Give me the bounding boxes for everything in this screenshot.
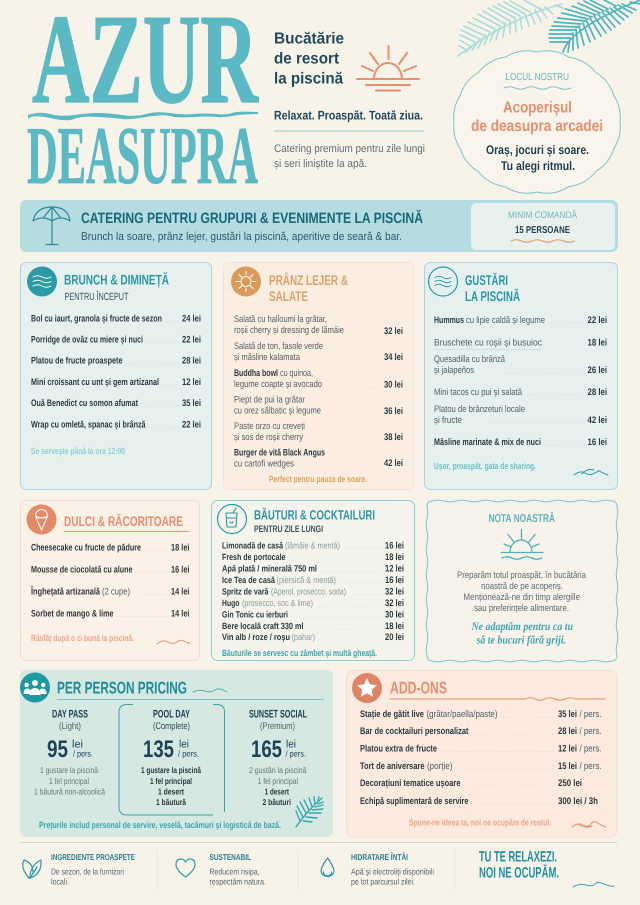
item bbox=[234, 368, 403, 390]
item bbox=[222, 598, 404, 609]
palm leaf: light bbox=[458, 0, 565, 56]
title bbox=[27, 0, 259, 201]
item bbox=[234, 314, 403, 337]
heading: SALATE bbox=[269, 288, 308, 304]
subtitle: la piscină bbox=[274, 70, 343, 88]
icon: small palm bbox=[296, 797, 323, 827]
heading: DULCI & RĂCORITOARE bbox=[64, 513, 183, 529]
footnote: Se servește până la ora 12:00 bbox=[31, 446, 125, 457]
script callout bbox=[471, 621, 574, 646]
item: Ice Tea de casă bbox=[222, 575, 276, 585]
item: cu lipie caldă și legume bbox=[466, 315, 545, 326]
badge: locul nostru: Oraș, jocuri și soare. bbox=[486, 143, 589, 157]
item: 42 lei bbox=[384, 458, 403, 469]
panel: brunch bbox=[20, 262, 212, 490]
panel: lunch bbox=[224, 262, 414, 490]
body text: Preparăm totul proaspăt, în bucătăria bbox=[457, 570, 587, 581]
heading: NOTA NOASTRĂ bbox=[488, 511, 555, 525]
item bbox=[222, 621, 404, 632]
item: 36 lei bbox=[384, 406, 403, 417]
item: cu orez sălbatic și legume bbox=[234, 406, 321, 416]
item bbox=[31, 608, 190, 620]
item: Înghețată artizanală bbox=[30, 586, 101, 598]
heading bbox=[465, 272, 520, 304]
item: Sorbet de mango & lime bbox=[31, 608, 114, 620]
tier: pool day bbox=[119, 704, 224, 815]
item: 28 lei bbox=[558, 726, 577, 737]
tier: day pass: 95 bbox=[47, 736, 68, 763]
tier: day pass: lei bbox=[72, 738, 83, 750]
icon: ice cream bbox=[26, 504, 56, 534]
item bbox=[434, 315, 607, 326]
icon: drop bbox=[321, 858, 334, 877]
item: cu quinoa, bbox=[280, 368, 313, 379]
item: Mousse de ciocolată cu alune bbox=[31, 564, 132, 576]
text: respectăm natura. bbox=[210, 876, 266, 886]
item: 24 lei bbox=[182, 314, 201, 324]
item: 300 lei / 3h bbox=[558, 796, 598, 807]
item: Platou de brânzeturi locale bbox=[434, 404, 525, 415]
item: 12 lei bbox=[182, 377, 201, 388]
item: 22 lei bbox=[182, 334, 201, 346]
item: 16 lei bbox=[385, 575, 404, 586]
tier: pool day: POOL DAY bbox=[153, 708, 190, 720]
item: Salată de ton, fasole verde bbox=[234, 341, 323, 352]
item: 28 lei bbox=[182, 356, 201, 366]
item: 20 lei bbox=[385, 632, 404, 643]
subheading: PENTRU ZILE LUNGI bbox=[254, 524, 323, 535]
item: 34 lei bbox=[384, 352, 403, 363]
item: Hummus bbox=[434, 315, 464, 326]
item bbox=[434, 387, 607, 398]
item: Apă plată / minerală 750 ml bbox=[222, 564, 317, 574]
item bbox=[360, 726, 602, 737]
body text bbox=[457, 570, 587, 614]
tier: sunset social: 1 fel principal bbox=[258, 776, 298, 786]
tier: pool day: / pers. bbox=[178, 748, 199, 758]
item bbox=[222, 575, 404, 586]
item: și sos de roșii cherry bbox=[234, 432, 303, 443]
item bbox=[360, 796, 598, 807]
item: Mini croissant cu unt și gem artizanal bbox=[31, 377, 159, 388]
footnote: Ușor, proaspăt, gata de sharing. bbox=[434, 461, 536, 472]
item bbox=[222, 632, 404, 643]
wave bbox=[157, 640, 190, 644]
icon: heart bbox=[176, 859, 195, 877]
item bbox=[30, 586, 190, 598]
subheading: PENTRU ÎNCEPUT bbox=[64, 290, 129, 303]
item: Buddha bowl bbox=[234, 368, 278, 379]
item: Paste orzo cu creveți bbox=[234, 421, 305, 432]
badge: locul nostru: Acoperișul bbox=[503, 100, 572, 116]
item: roșii cherry și dressing de lămâie bbox=[234, 325, 344, 336]
item bbox=[434, 404, 607, 426]
tagline: Relaxat. Proaspăt. Toată ziua. bbox=[274, 108, 423, 122]
tier: sunset social: 2 gustări la piscină bbox=[249, 765, 307, 775]
wave bbox=[572, 822, 606, 827]
item: Tort de aniversare bbox=[360, 761, 424, 772]
body text: sau preferințele alimentare. bbox=[474, 603, 569, 614]
subtitle: de resort bbox=[274, 50, 340, 68]
heading: PRÂNZ LEJER & bbox=[269, 272, 348, 288]
item: 14 lei bbox=[171, 608, 190, 620]
tier: sunset social: 1 desert bbox=[264, 786, 289, 796]
item bbox=[222, 552, 404, 563]
footer: fresh ingredients bbox=[23, 852, 135, 886]
item: Stație de gătit live bbox=[360, 709, 424, 720]
tier: pool day: 135 bbox=[143, 736, 174, 763]
item: Piept de pui la grătar bbox=[234, 394, 305, 406]
tier: pool day: 1 băutură bbox=[156, 797, 186, 807]
item: 38 lei bbox=[384, 432, 403, 443]
heading: BRUNCH & DIMINEȚĂ bbox=[64, 272, 169, 288]
footnote: Spune-ne ideea ta, noi ne ocupăm de restul. bbox=[409, 818, 551, 828]
item: / pers. bbox=[580, 744, 602, 754]
item: 32 lei bbox=[384, 326, 403, 337]
tier: sunset social: 165 bbox=[251, 736, 282, 763]
heading bbox=[269, 272, 348, 304]
text: Reducem risipa, bbox=[210, 866, 260, 876]
banner subheading: Brunch la soare, prânz lejer, gustări la piscină, aperitive de seară & bar. bbox=[81, 231, 402, 243]
item bbox=[222, 610, 404, 620]
tier: day pass: 1 fel principal bbox=[49, 776, 89, 786]
closing slogan bbox=[479, 848, 559, 882]
text: INGREDIENTE PROASPETE bbox=[51, 852, 135, 862]
text: De sezon, de la furnizori bbox=[51, 866, 124, 876]
badge: locul nostru: LOCUL NOSTRU bbox=[506, 72, 569, 83]
tier: sunset social: (Premium) bbox=[260, 721, 295, 732]
tier: pool day: 1 gustare la piscină bbox=[141, 765, 201, 775]
item: Cheesecake cu fructe de pădure bbox=[31, 542, 141, 554]
palm leaf: dark bbox=[549, 0, 640, 52]
panel: pool snacks bbox=[424, 262, 618, 490]
item bbox=[360, 778, 582, 789]
footer: hydration bbox=[321, 852, 434, 886]
tier: sunset social: / pers. bbox=[286, 748, 306, 758]
item: 32 lei bbox=[385, 586, 404, 598]
item: Echipă suplimentară de servire bbox=[360, 796, 468, 807]
closing slogan: NOI NE OCUPĂM. bbox=[479, 864, 559, 882]
item bbox=[360, 744, 602, 754]
footnote: Perfect pentru pauza de soare. bbox=[269, 474, 367, 484]
title: DEASUPRA bbox=[27, 110, 258, 201]
item: Limonadă de casă bbox=[222, 540, 284, 550]
item: (porție) bbox=[427, 761, 452, 772]
item: 18 lei bbox=[588, 338, 607, 348]
badge: locul nostru: de deasupra arcadei bbox=[471, 118, 603, 135]
subtitle: Bucătărie bbox=[274, 30, 344, 48]
badge: locul nostru bbox=[454, 51, 620, 193]
item: 28 lei bbox=[588, 387, 607, 398]
item bbox=[222, 586, 404, 598]
item: (lămâie & mentă) bbox=[285, 540, 340, 550]
item: / pers. bbox=[580, 726, 602, 737]
item: Spritz de vară bbox=[222, 586, 269, 596]
heading: PER PERSON PRICING bbox=[57, 678, 187, 698]
banner heading: CATERING PENTRU GRUPURI & EVENIMENTE LA PISCINĂ bbox=[81, 209, 423, 227]
item: / pers. bbox=[580, 761, 602, 772]
text: pe tot parcursul zilei. bbox=[351, 876, 415, 886]
tier: pool day: 1 fel principal bbox=[150, 776, 192, 786]
item: 26 lei bbox=[588, 365, 607, 376]
icon: umbrella bbox=[33, 207, 70, 244]
item bbox=[222, 564, 404, 574]
script callout: Ne adaptăm pentru ca tu bbox=[471, 621, 574, 633]
intro text: și seri liniștite la apă. bbox=[274, 158, 367, 170]
item: legume coapte și avocado bbox=[234, 379, 322, 390]
text: HIDRATARE ÎNTÂI bbox=[351, 852, 408, 862]
item: Bol cu iaurt, granola și fructe de sezon bbox=[31, 314, 162, 324]
footer: sustainable bbox=[176, 852, 266, 886]
banner: catering bbox=[20, 200, 618, 252]
item: / pers. bbox=[580, 709, 602, 720]
item: Burger de vită Black Angus bbox=[234, 448, 325, 458]
item: 16 lei bbox=[385, 540, 404, 552]
item: 18 lei bbox=[171, 542, 190, 554]
item: (pahar) bbox=[292, 632, 315, 642]
item: 22 lei bbox=[182, 420, 201, 430]
item bbox=[234, 394, 403, 417]
tier: sunset social: 2 băuturi bbox=[262, 797, 291, 807]
item: Wrap cu omletă, spanac și brânză bbox=[31, 420, 146, 430]
item: (prosecco, soc & lime) bbox=[242, 598, 313, 608]
item bbox=[234, 341, 403, 363]
icon: star bbox=[352, 673, 382, 703]
icon: waves outline bbox=[428, 267, 458, 296]
tier: day pass bbox=[34, 708, 105, 796]
text bbox=[351, 852, 434, 886]
tier: pool day: lei bbox=[179, 738, 189, 750]
item: 30 lei bbox=[385, 610, 404, 620]
item: (Aperol, prosecco, soda) bbox=[271, 586, 346, 596]
item: Mini tacos cu pui și salată bbox=[434, 387, 523, 398]
item: Vin alb / roze / roșu bbox=[222, 632, 290, 643]
icon: sun bbox=[357, 46, 419, 90]
heading: LA PISCINĂ bbox=[465, 288, 520, 304]
icon: leaf bbox=[23, 860, 41, 878]
item: 35 lei bbox=[182, 398, 201, 409]
intro text bbox=[274, 143, 425, 170]
text: SUSTENABIL bbox=[210, 852, 251, 862]
item: Fresh de portocale bbox=[222, 552, 286, 562]
closing slogan: TU TE RELAXEZI. bbox=[479, 848, 557, 866]
item: Bruschete cu roșii și busuioc bbox=[434, 338, 542, 348]
tier: day pass: 1 băutură non-alcoolică bbox=[34, 786, 105, 796]
item: 22 lei bbox=[588, 315, 607, 326]
item: 18 lei bbox=[385, 552, 404, 563]
item: Gin Tonic cu ierburi bbox=[222, 610, 288, 620]
tier: day pass: 1 gustare la piscină bbox=[40, 765, 98, 775]
item: Salată cu halloumi la grătar, bbox=[234, 314, 327, 325]
item: Porridge de ovăz cu miere și nuci bbox=[31, 334, 143, 346]
tier: day pass: DAY PASS bbox=[52, 708, 88, 720]
icon: group bbox=[20, 672, 50, 702]
item bbox=[360, 761, 602, 772]
heading: ADD-ONS bbox=[390, 678, 447, 698]
item: cu cartofi wedges bbox=[234, 458, 294, 470]
text bbox=[210, 852, 266, 886]
item bbox=[222, 540, 404, 552]
item: (2 cupe) bbox=[102, 586, 130, 598]
text: Apă și electroliți disponibili bbox=[351, 866, 434, 876]
tier: pool day: 1 desert bbox=[158, 786, 184, 796]
panel: pricing bbox=[20, 670, 333, 837]
item bbox=[360, 709, 602, 720]
tier: sunset social: lei bbox=[286, 738, 296, 750]
item: 12 lei bbox=[385, 564, 404, 574]
body text: noastră de pe acoperiș. bbox=[481, 581, 563, 592]
tier: sunset social: SUNSET SOCIAL bbox=[249, 708, 307, 720]
script callout: să te bucuri fără griji. bbox=[476, 634, 566, 646]
item: 42 lei bbox=[588, 415, 607, 426]
item: 18 lei bbox=[385, 621, 404, 632]
item: Platou de fructe proaspete bbox=[31, 356, 122, 366]
item: Hugo bbox=[222, 598, 240, 608]
icon: glass bbox=[218, 504, 246, 534]
subtitle bbox=[274, 30, 344, 88]
item: 32 lei bbox=[385, 598, 404, 609]
text bbox=[51, 852, 135, 886]
item: 35 lei bbox=[558, 709, 577, 720]
wave bbox=[573, 882, 614, 887]
item bbox=[434, 338, 607, 350]
panel: drinks bbox=[212, 500, 414, 660]
item: 250 lei bbox=[558, 778, 582, 789]
icon: waves bbox=[27, 266, 57, 296]
panel: add-ons bbox=[346, 670, 617, 837]
panel: our note bbox=[426, 500, 618, 662]
body text: Menționează-ne din timp alergille bbox=[464, 592, 580, 603]
item: 16 lei bbox=[588, 437, 607, 448]
footnote: Băuturile se servesc cu zâmbet și multă gheață. bbox=[222, 648, 377, 659]
item: Ouă Benedict cu somon afumat bbox=[31, 398, 139, 409]
minimum order box: MINIM COMANDĂ bbox=[508, 209, 578, 221]
heading: BĂUTURI & COCKTAILURI bbox=[254, 508, 375, 522]
item: 15 lei bbox=[558, 761, 577, 772]
item bbox=[234, 448, 403, 470]
minimum order box bbox=[471, 203, 615, 250]
item bbox=[434, 354, 607, 376]
minimum order box: 15 PERSOANE bbox=[515, 225, 570, 236]
footnote: Răsfăț după o zi bună la piscină. bbox=[31, 633, 134, 644]
text: locali. bbox=[51, 876, 69, 886]
item: și jalapeños bbox=[434, 365, 474, 376]
item: Bere locală craft 330 ml bbox=[222, 621, 304, 631]
item: (piersică & mentă) bbox=[276, 575, 336, 585]
item: (grătar/paella/paste) bbox=[426, 709, 498, 720]
item: 12 lei bbox=[558, 744, 577, 754]
item: Bar de cocktailuri personalizat bbox=[360, 726, 469, 737]
item: 16 lei bbox=[171, 564, 190, 576]
wave bbox=[574, 470, 608, 475]
badge: locul nostru: Tu alegi ritmul. bbox=[501, 159, 575, 173]
tier: day pass: / pers. bbox=[73, 748, 93, 758]
item: Măsline marinate & mix de nuci bbox=[434, 437, 541, 448]
item: Decorațiuni tematice ușoare bbox=[360, 778, 460, 789]
tier: sunset social bbox=[249, 708, 307, 807]
item: 14 lei bbox=[171, 586, 190, 598]
tier: day pass: (Light) bbox=[59, 721, 81, 732]
heading: GUSTĂRI bbox=[465, 272, 508, 288]
tier: pool day: (Complete) bbox=[153, 721, 190, 732]
item bbox=[234, 421, 403, 443]
item: și fructe bbox=[434, 415, 462, 426]
footnote: Prețurile includ personal de servire, veselă, tacâmuri și logistică de bază. bbox=[39, 820, 281, 831]
icon: sun over water bbox=[501, 530, 543, 559]
item: Platou extra de fructe bbox=[360, 744, 437, 754]
icon: sun bbox=[231, 266, 261, 296]
panel: desserts bbox=[20, 500, 200, 660]
intro text: Catering premium pentru zile lungi bbox=[274, 143, 425, 155]
item: Quesadilla cu brânză bbox=[434, 354, 506, 365]
item: și măsline kalamata bbox=[234, 352, 301, 363]
item: 30 lei bbox=[384, 380, 403, 390]
